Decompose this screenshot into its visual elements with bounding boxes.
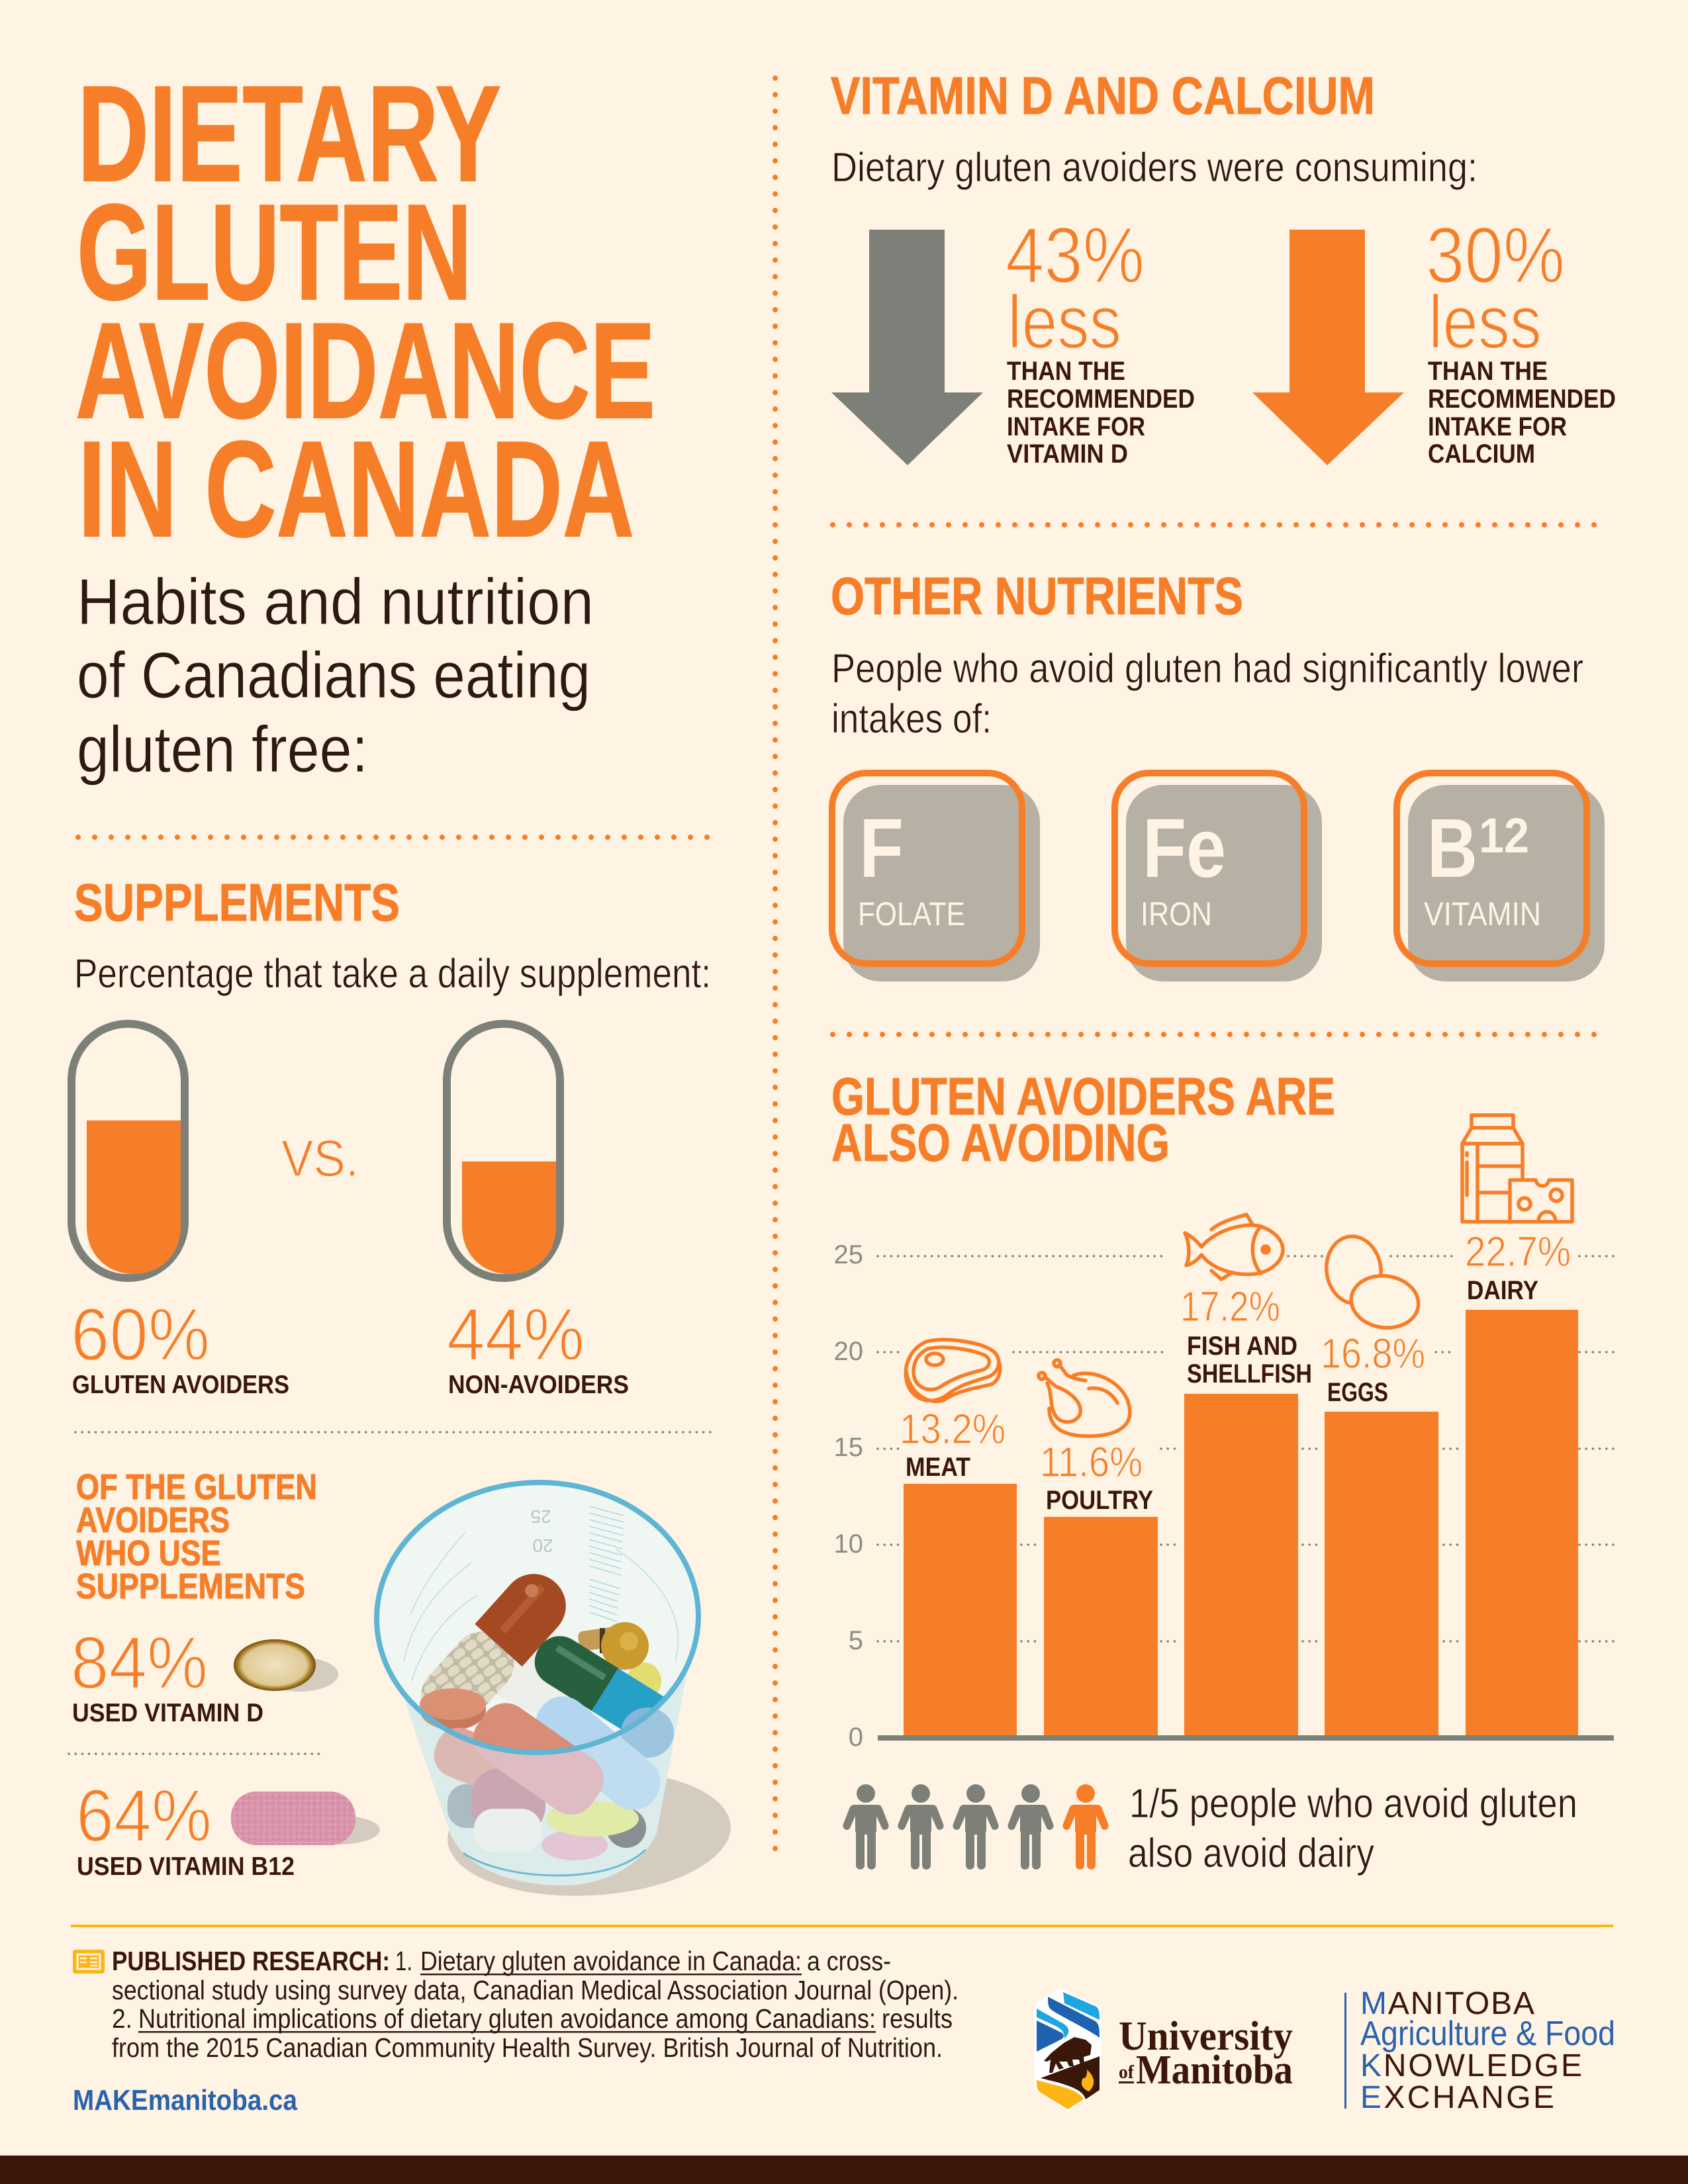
icon: folate tile: [832, 773, 1040, 981]
bar chart: [834, 1228, 1614, 1752]
stat: 30 percent less calcium: 30%: [1426, 211, 1565, 300]
stat: 60 percent gluten avoiders: 60%: [71, 1293, 210, 1376]
icon: iron tile: Fe: [1143, 801, 1226, 895]
heading: also avoiding: GLUTEN AVOIDERS ARE: [831, 1067, 1335, 1126]
logo: Manitoba Agriculture and Food Knowledge Exchange: Agriculture & Food: [1360, 2015, 1615, 2053]
label: meat: MEAT: [906, 1453, 970, 1482]
stat: 44 percent non-avoiders: [447, 1293, 629, 1399]
title: AVOIDANCE: [75, 295, 655, 447]
footer: published research: from the 2015 Canadian Community Health Survey. British Journal of Nutrition.: [112, 2032, 943, 2063]
icon: iron tile: [1115, 773, 1322, 981]
logo: University of Manitoba: University: [1119, 2014, 1293, 2059]
heading: supplements: SUPPLEMENTS: [74, 873, 400, 932]
logo: University of Manitoba: Manitoba: [1136, 2048, 1293, 2093]
label: fish and shellfish: SHELLFISH: [1187, 1359, 1312, 1388]
icon: capsule gauge 60 percent: [71, 1024, 185, 1278]
stat: 84 percent vitamin D: 84%: [71, 1621, 208, 1704]
stat: 30 percent less calcium: less: [1429, 281, 1542, 365]
heading: vitamin D and calcium: VITAMIN D AND CALCIUM: [831, 66, 1375, 125]
icon: vitamin B12 tile: B: [1427, 801, 1477, 895]
text: nutrients intro: People who avoid gluten had significantly lower: [831, 646, 1583, 692]
title: IN CANADA: [78, 413, 634, 565]
label: eggs: EGGS: [1327, 1378, 1388, 1407]
panel: vitamin D and calcium: [831, 66, 1616, 469]
heading: also avoiding: ALSO AVOIDING: [831, 1113, 1170, 1172]
heading: of the gluten avoiders: OF THE GLUTEN: [76, 1467, 317, 1507]
footer: published research: 2.: [112, 2003, 132, 2034]
text: nutrients intro: [831, 646, 1583, 742]
label: dairy: [1465, 1228, 1571, 1305]
stat: 30 percent less calcium: CALCIUM: [1428, 439, 1535, 469]
label: fish and shellfish: FISH AND: [1187, 1332, 1297, 1361]
subtitle: Habits and nutrition: [77, 565, 594, 638]
footer: published research: [73, 1946, 959, 2063]
icon: eggs: [1322, 1233, 1422, 1332]
stat: 30 percent less calcium: INTAKE FOR: [1428, 412, 1567, 441]
stat: 64 percent vitamin B12: 64%: [76, 1774, 212, 1857]
icon row: one in five people: [843, 1784, 1109, 1870]
icon: journal: [73, 1950, 105, 1974]
stat: 43 percent less vitamin D: [1006, 211, 1195, 469]
heading: of the gluten avoiders: [76, 1467, 317, 1606]
logo: Manitoba Agriculture and Food Knowledge Exchange: [1344, 1986, 1615, 2115]
bar chart: 25: [834, 1240, 863, 1269]
text: vitamin intro: Dietary gluten avoiders were consuming:: [831, 145, 1477, 191]
stat: 43 percent less vitamin D: 43%: [1006, 211, 1145, 300]
stat: 30 percent less calcium: RECOMMENDED: [1428, 385, 1616, 414]
label: dairy: DAIRY: [1467, 1276, 1538, 1305]
title: DIETARY: [77, 58, 501, 210]
logo: University of Manitoba: [1034, 1989, 1293, 2111]
stat: 44 percent non-avoiders: NON-AVOIDERS: [448, 1371, 629, 1399]
footer: published research: PUBLISHED RESEARCH:: [112, 1946, 390, 1976]
label: meat: 13.2%: [900, 1405, 1006, 1453]
stat: 84 percent vitamin D: USED VITAMIN D: [72, 1699, 263, 1727]
panel: supplements: [69, 873, 734, 1903]
arrow: gray down: [831, 230, 983, 465]
stat: 43 percent less vitamin D: RECOMMENDED: [1007, 385, 1195, 414]
icon: vitamin B12 tile: VITAMIN: [1424, 895, 1541, 933]
heading: of the gluten avoiders: WHO USE: [76, 1533, 221, 1573]
icon: softgel: [234, 1639, 338, 1692]
footer: published research: results: [882, 2003, 953, 2034]
stat: 60 percent gluten avoiders: GLUTEN AVOIDERS: [72, 1371, 289, 1399]
label: meat: [900, 1405, 1006, 1482]
bar chart: 0: [849, 1723, 863, 1752]
text: one in five avoid dairy: also avoid dairy: [1128, 1831, 1374, 1876]
stat: 64 percent vitamin B12: [76, 1774, 295, 1881]
logo: Manitoba Agriculture and Food Knowledge Exchange: MANITOBA: [1360, 1986, 1534, 2021]
title: [75, 58, 655, 565]
icon: fish: [1185, 1214, 1283, 1279]
label: poultry: POULTRY: [1046, 1486, 1153, 1515]
link: MAKEmanitoba.ca: MAKEmanitoba.ca: [73, 2084, 297, 2116]
bar chart: 20: [834, 1337, 863, 1366]
stat: 44 percent non-avoiders: 44%: [447, 1293, 585, 1376]
text: versus: VS.: [281, 1129, 359, 1187]
label: dairy: 22.7%: [1465, 1228, 1571, 1275]
subtitle: [77, 565, 594, 786]
stat: 43 percent less vitamin D: VITAMIN D: [1007, 439, 1128, 469]
stat: 30 percent less calcium: THAN THE: [1428, 357, 1548, 386]
logo: University of Manitoba: of: [1119, 2062, 1135, 2083]
stat: 43 percent less vitamin D: less: [1008, 281, 1121, 365]
label: eggs: [1321, 1330, 1425, 1407]
photo: cup of pills: 25: [530, 1506, 551, 1527]
label: poultry: [1040, 1438, 1153, 1515]
label: poultry: 11.6%: [1040, 1438, 1143, 1486]
stat: 30 percent less calcium: [1426, 211, 1616, 469]
logo: Manitoba Agriculture and Food Knowledge Exchange: EXCHANGE: [1360, 2080, 1554, 2115]
stat: 64 percent vitamin B12: USED VITAMIN B12: [77, 1852, 295, 1881]
text: nutrients intro: intakes of:: [831, 696, 992, 742]
heading: of the gluten avoiders: SUPPLEMENTS: [76, 1567, 305, 1606]
subtitle: of Canadians eating: [77, 639, 590, 711]
icon: milk and cheese: [1462, 1115, 1572, 1222]
stat: 43 percent less vitamin D: INTAKE FOR: [1007, 412, 1145, 441]
icon: iron tile: IRON: [1141, 895, 1212, 933]
label: fish and shellfish: 17.2%: [1180, 1283, 1280, 1330]
stat: 60 percent gluten avoiders: [71, 1293, 289, 1399]
text: supplement intro: Percentage that take a daily supplement:: [74, 951, 711, 997]
bar chart: 10: [834, 1529, 863, 1559]
stat: 43 percent less vitamin D: THAN THE: [1007, 357, 1125, 386]
photo: cup of pills: 20: [532, 1535, 553, 1556]
icon: capsule gauge 44 percent: [447, 1024, 560, 1278]
heading: other nutrients: OTHER NUTRIENTS: [831, 567, 1243, 625]
bar chart: 5: [849, 1626, 863, 1655]
icon: poultry: [1039, 1360, 1130, 1436]
footer: published research: Nutritional implications of dietary gluten avoidance among Canadians:: [138, 2003, 876, 2034]
label: eggs: 16.8%: [1321, 1330, 1425, 1377]
title: GLUTEN: [77, 176, 472, 328]
text: one in five avoid dairy: [1128, 1781, 1577, 1876]
footer: published research: a cross-: [807, 1946, 891, 1976]
footer: published research: 1.: [395, 1946, 412, 1976]
heading: of the gluten avoiders: AVOIDERS: [76, 1500, 230, 1540]
subtitle: gluten free:: [77, 713, 368, 786]
panel: other nutrients: [831, 567, 1605, 981]
icon: folate tile: FOLATE: [858, 895, 965, 933]
logo: Manitoba Agriculture and Food Knowledge Exchange: KNOWLEDGE: [1360, 2048, 1582, 2083]
icon: vitamin B12 tile: 12: [1479, 808, 1529, 863]
icon: steak: [906, 1340, 1000, 1401]
icon: vitamin B12 tile: [1397, 773, 1605, 981]
label: fish and shellfish: [1180, 1283, 1312, 1388]
icon: pink tablet: [231, 1792, 380, 1845]
icon: folate tile: F: [859, 801, 904, 895]
heading: also avoiding: [831, 1067, 1335, 1172]
stat: 84 percent vitamin D: [71, 1621, 263, 1727]
text: one in five avoid dairy: 1/5 people who avoid gluten: [1129, 1781, 1577, 1827]
photo: cup of pills: [373, 1479, 734, 1903]
arrow: orange down: [1252, 230, 1404, 465]
bar chart: 15: [834, 1433, 863, 1462]
footer: published research: sectional study using survey data, Canadian Medical Association Journal (Open).: [112, 1975, 959, 2005]
panel: gluten avoiders are also avoiding: [831, 1067, 1614, 1876]
footer: published research: Dietary gluten avoidance in Canada:: [420, 1946, 802, 1976]
